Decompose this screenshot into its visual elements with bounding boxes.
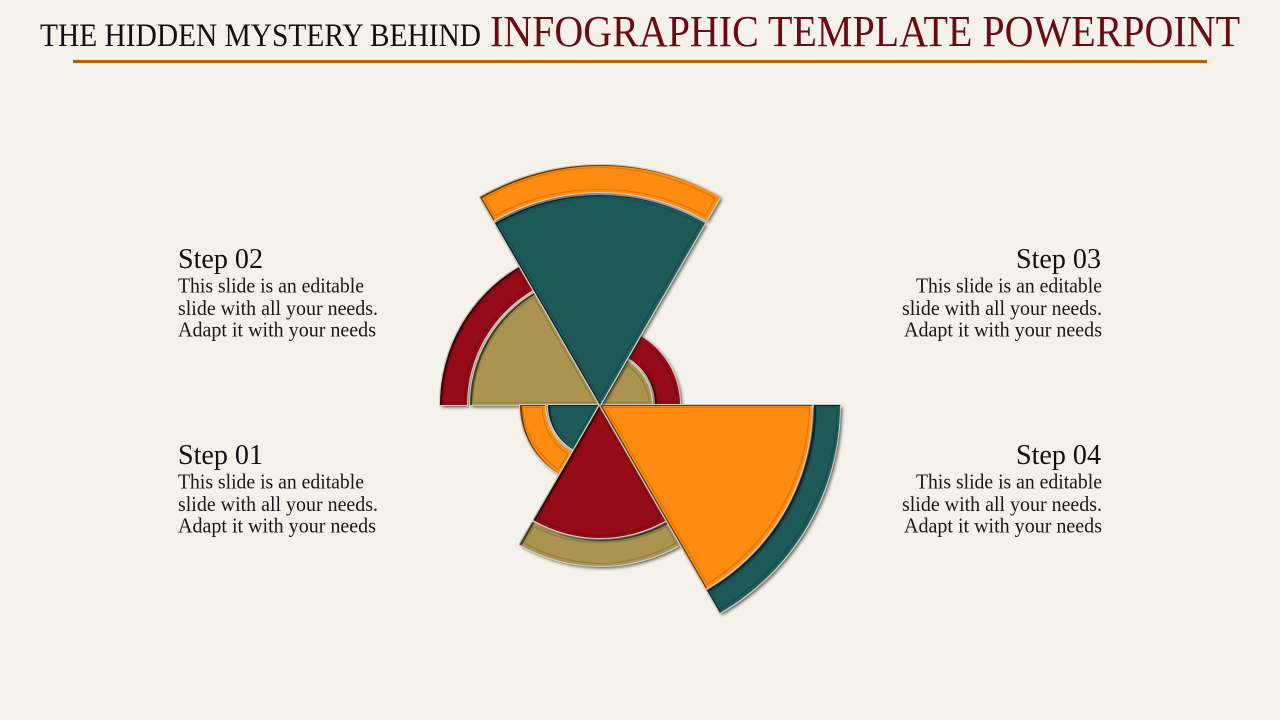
text block: step 02	[178, 244, 378, 342]
text block: step 03	[902, 244, 1102, 342]
text block: step 03: Adapt it with your needs	[904, 318, 1102, 342]
text block: step 03: This slide is an editable	[916, 274, 1102, 298]
text block: step 02: Adapt it with your needs	[178, 318, 376, 342]
step 03 wedge: tan	[600, 360, 652, 405]
step 04 wedge: orange	[600, 405, 812, 589]
text block: step 01	[178, 440, 378, 538]
title underline	[73, 60, 1207, 63]
text block: step 04: slide with all your needs.	[902, 492, 1102, 516]
text block: step 01: This slide is an editable	[178, 470, 364, 494]
title: THE HIDDEN MYSTERY BEHIND	[40, 18, 481, 54]
text block: step 03: slide with all your needs.	[902, 296, 1102, 320]
text block: step 02: This slide is an editable	[178, 274, 364, 298]
text block: step 01: Step 01	[178, 440, 263, 471]
text block: step 01: slide with all your needs.	[178, 492, 378, 516]
text block: step 01: Adapt it with your needs	[178, 514, 376, 538]
step 01 small outer ring: orange	[520, 405, 572, 474]
step 04 outer ring: teal	[707, 405, 840, 613]
text block: step 03: Step 03	[1016, 244, 1101, 275]
step 03 outer ring: red	[628, 336, 680, 405]
text block: step 02: slide with all your needs.	[178, 296, 378, 320]
top outer ring: orange	[480, 165, 720, 221]
title	[40, 7, 1240, 56]
bottom wedge: red	[534, 405, 666, 538]
top wedge: teal	[495, 195, 705, 405]
text block: step 04	[902, 440, 1102, 538]
text block: step 02: Step 02	[178, 244, 263, 275]
text block: step 04: Step 04	[1016, 440, 1101, 471]
bottom outer ring: tan	[520, 522, 680, 566]
step 02 outer ring: red	[440, 266, 534, 405]
radial pie chart	[440, 165, 840, 613]
text block: step 04: This slide is an editable	[916, 470, 1102, 494]
step 01 small wedge: teal	[548, 405, 600, 450]
step 02 wedge: tan	[470, 292, 600, 405]
text block: step 04: Adapt it with your needs	[904, 514, 1102, 538]
